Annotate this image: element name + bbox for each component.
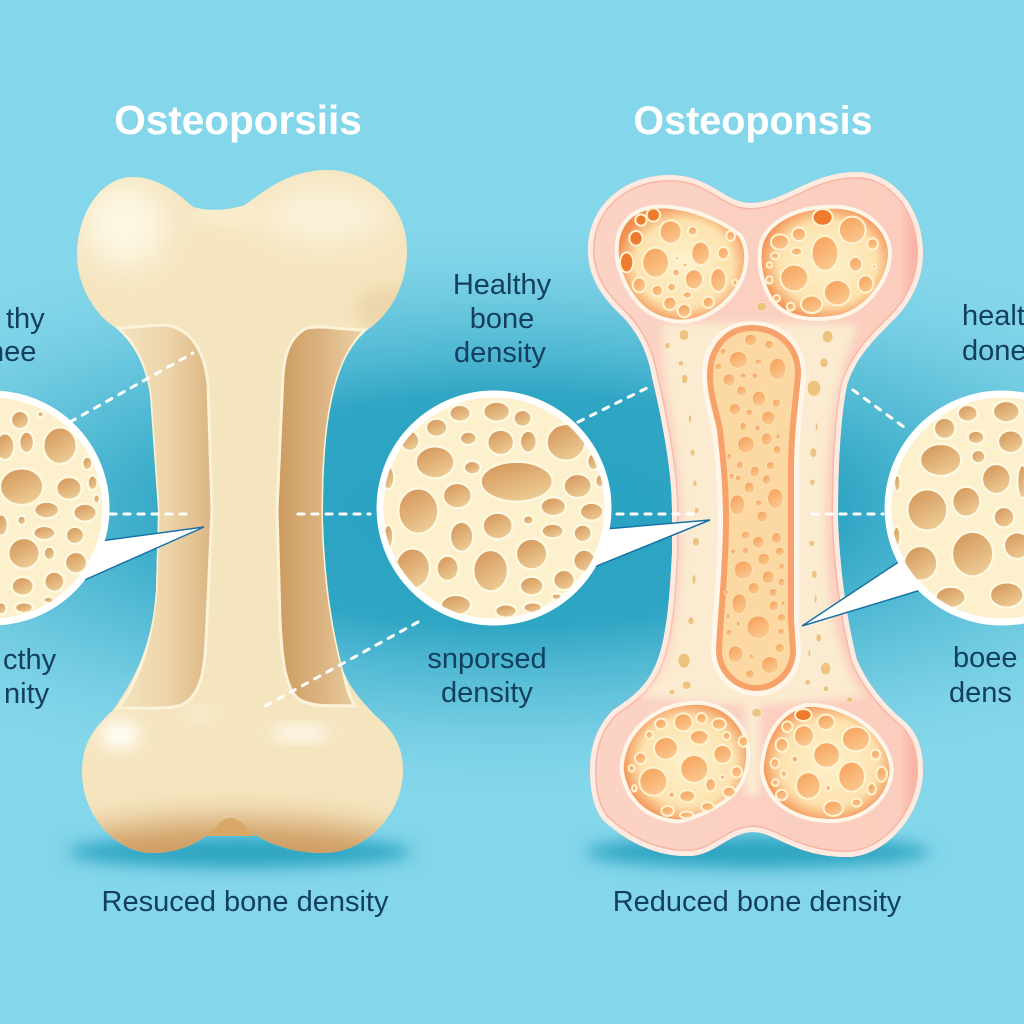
head: bottom-right spongy — [762, 705, 892, 821]
osteoporotic bone illustration — [588, 172, 923, 857]
magnifier: center — [380, 394, 608, 622]
labels: center bottom: snporsed — [427, 643, 547, 675]
bone shadow: right — [585, 836, 929, 868]
labels: right edge top: healt — [962, 300, 1024, 332]
right groove — [277, 327, 365, 706]
labels: left edge top: thy — [6, 303, 45, 335]
caption: left: Resuced bone density — [102, 886, 389, 918]
dashed leader lines — [70, 353, 908, 709]
labels: left edge bottom: nity — [4, 678, 50, 710]
pointer: right — [802, 561, 921, 626]
speckles in cortical bone — [665, 302, 853, 717]
labels: left edge bottom: cthy — [3, 644, 57, 676]
left groove — [118, 325, 212, 708]
labels: center top: density — [454, 337, 546, 369]
labels: right edge bottom: dens — [949, 677, 1012, 709]
head: top-left spongy — [617, 207, 746, 322]
cortical cream layer — [640, 323, 866, 795]
head: top-right spongy — [760, 207, 890, 319]
magnifier: far right — [888, 394, 1024, 622]
healthy bone illustration — [77, 170, 407, 853]
pointer: center — [592, 520, 710, 568]
labels: center bottom: density — [441, 677, 533, 709]
heading: left: Osteoporsiis — [114, 97, 362, 143]
labels: center top: bone — [470, 303, 534, 335]
head: bottom-left spongy — [622, 703, 748, 822]
magnifier: far left — [0, 394, 106, 622]
labels: center top: Healthy — [453, 269, 552, 301]
heading: right: Osteoponsis — [633, 99, 873, 143]
pointer: left — [80, 527, 204, 582]
caption: right: Reduced bone density — [613, 886, 902, 918]
marrow cavity — [706, 325, 802, 692]
bone shadow: left — [68, 836, 412, 868]
